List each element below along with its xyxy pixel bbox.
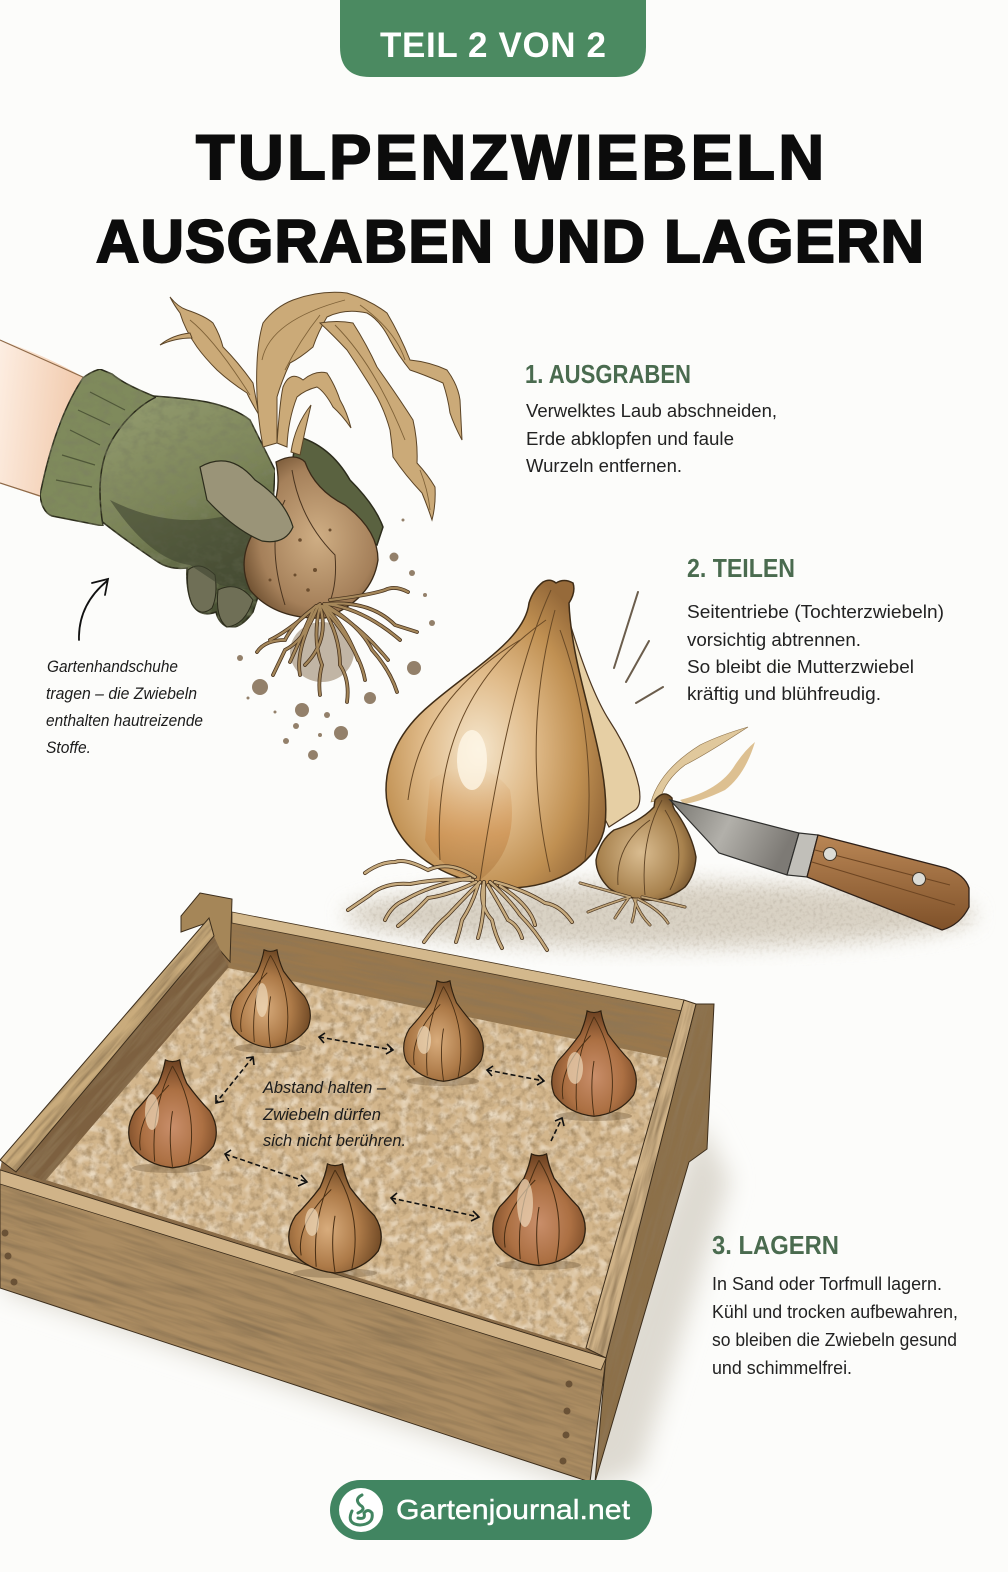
lower fingers (188, 566, 253, 627)
left wall top band (0, 919, 214, 1171)
step 2 text: vorsichtig abtrennen. (687, 629, 861, 650)
step 3 text: 3. LAGERN (712, 1230, 839, 1260)
wooden crate with sand (0, 892, 714, 1538)
front wall top band (0, 1170, 606, 1370)
handwritten note: spacing: Zwiebeln dürfen (262, 1106, 381, 1124)
front wall (0, 1170, 610, 1489)
short arrow (551, 1118, 564, 1141)
dark palm shadow (110, 500, 265, 590)
interior base (0, 915, 684, 1358)
glove body (80, 395, 275, 627)
spacing arrows (216, 1033, 544, 1221)
icon: daughter bulb (580, 727, 755, 925)
handwritten note: spacing (262, 1079, 406, 1150)
left inner wall (24, 937, 228, 1180)
cuff (40, 369, 156, 526)
bulbs in crate (129, 950, 636, 1273)
step 1 text: Verwelktes Laub abschneiden, (526, 400, 777, 421)
back-left post (181, 893, 232, 962)
step 2 text: So bleibt die Mutterzwiebel (687, 656, 914, 677)
nails (2, 1230, 572, 1464)
icon: glove thumb (200, 461, 293, 542)
header pill: part label (340, 0, 646, 77)
footer pill: brand: Gartenjournal.net (396, 1494, 630, 1525)
step 2 text: 2. TEILEN (687, 553, 795, 583)
icon: dried leaves (160, 292, 462, 520)
bulb skin lines (140, 955, 612, 1272)
handwritten note: gloves (46, 658, 203, 757)
step 3 text (712, 1230, 958, 1378)
skin lines (408, 590, 589, 880)
step 1 text: Erde abklopfen und faule (526, 428, 734, 449)
soil behind roots (290, 622, 354, 682)
handwritten note: spacing: sich nicht berühren. (263, 1132, 406, 1150)
step 3 text: und schimmelfrei. (712, 1357, 852, 1378)
arm (0, 340, 85, 497)
handwritten note: gloves: Stoffe. (46, 739, 91, 757)
step 3 text: so bleiben die Zwiebeln gesund (712, 1329, 957, 1350)
cuff ribs (56, 392, 125, 487)
bulb body (386, 580, 606, 888)
highlight (457, 730, 487, 790)
title (96, 123, 924, 275)
back wall (228, 924, 680, 1058)
warm shading (425, 767, 512, 880)
icon: dug-up bulb with roots (244, 457, 417, 702)
handwritten note: gloves: Gartenhandschuhe (47, 658, 178, 676)
right wall top band (588, 1000, 696, 1358)
icon: large mother bulb (348, 580, 640, 950)
handwritten note: spacing: Abstand halten – (262, 1079, 387, 1097)
bulb contact shadows (132, 1043, 632, 1278)
bulb highlights (145, 983, 583, 1236)
icon: knife (670, 800, 969, 930)
outer right wall (596, 1004, 714, 1477)
step 2 text: kräftig und blühfreudig. (687, 683, 881, 704)
handwritten note: gloves: tragen – die Zwiebeln (46, 685, 197, 703)
title: AUSGRABEN UND LAGERN (96, 208, 924, 275)
arrow: to glove (79, 579, 108, 640)
step 1 text: Wurzeln entfernen. (526, 455, 682, 476)
step 2 text (687, 553, 944, 704)
ground shadow (345, 883, 975, 947)
title: TULPENZWIEBELN (196, 123, 824, 193)
crate shadow (0, 1120, 730, 1490)
step 3 text: In Sand oder Torfmull lagern. (712, 1273, 942, 1294)
step 1 text: 1. AUSGRABEN (525, 359, 691, 389)
motion lines (614, 592, 663, 703)
soil crumbs (237, 518, 435, 760)
step 3 text: Kühl und trocken aufbewahren, (712, 1301, 958, 1322)
sand (46, 968, 668, 1350)
outer peeling layer (569, 620, 640, 827)
back fingers (290, 436, 383, 545)
illustration: gloved hand (0, 340, 383, 627)
header pill: part label: TEIL 2 VON 2 (380, 26, 606, 65)
step 1 text (525, 359, 777, 476)
step 2 text: Seitentriebe (Tochterzwiebeln) (687, 601, 944, 622)
footer pill: brand (330, 1480, 652, 1540)
handwritten note: gloves: enthalten hautreizende (46, 712, 203, 730)
